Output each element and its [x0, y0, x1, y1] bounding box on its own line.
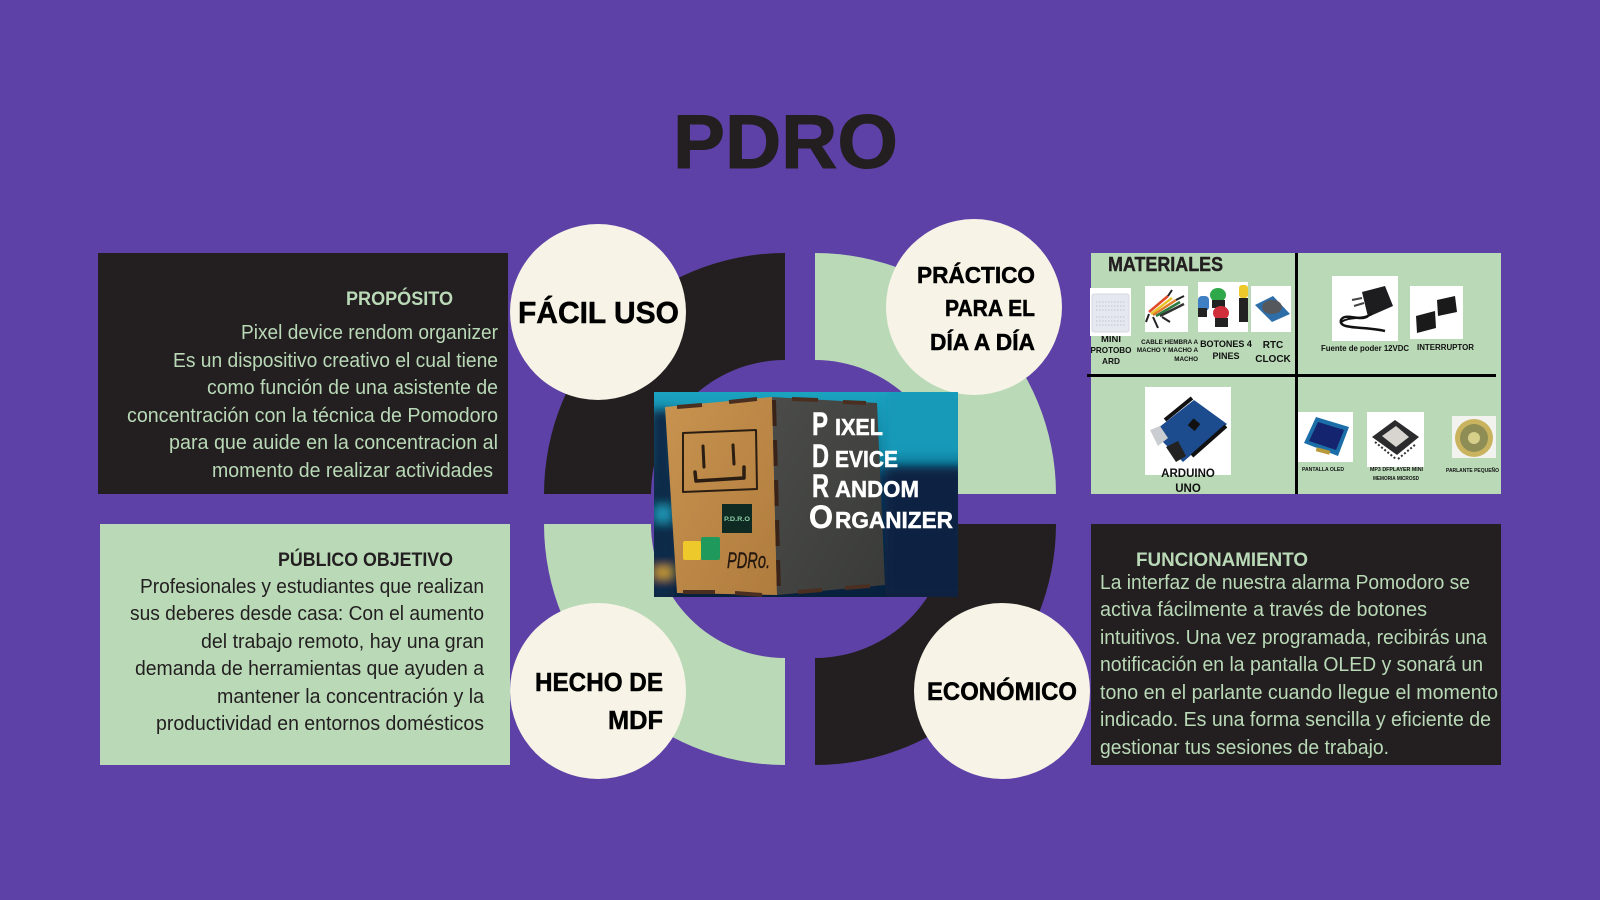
label: mp3 dfplayer — [1370, 467, 1423, 482]
icon: rtc clock — [1251, 286, 1291, 332]
text block: público objetivo: sus deberes desde casa: Con el aumento — [130, 603, 484, 625]
label: cables — [1137, 339, 1198, 363]
icon: pantalla oled — [1298, 412, 1353, 462]
text block: funcionamiento: gestionar tus sesiones de trabajo. — [1100, 737, 1389, 759]
handwritten pdro: PDRo. — [727, 548, 770, 573]
label: mini protoboard — [1090, 334, 1132, 366]
text block: público objetivo: mantener la concentración y la — [217, 686, 485, 708]
text block: público objetivo: demanda de herramientas que ayuden a — [135, 658, 485, 680]
circle: práctico para el día a día: PRÁCTICO — [917, 261, 1035, 288]
photo title text: ANDOM — [835, 476, 919, 502]
label: arduino uno — [1161, 468, 1215, 495]
heading: funcionamiento: FUNCIONAMIENTO — [1136, 550, 1308, 571]
text block: funcionamiento: notificación en la pantalla OLED y sonará un — [1100, 654, 1483, 676]
icon: parlante — [1452, 416, 1496, 458]
text block: propósito: Es un dispositivo creativo el cual tiene — [173, 350, 498, 372]
photo title text: P — [812, 406, 828, 442]
text block: público objetivo: productividad en entornos domésticos — [156, 713, 484, 735]
box left face — [665, 397, 777, 595]
text block: funcionamiento: intuitivos. Una vez programada, recibirás una — [1100, 627, 1488, 649]
panel: funcionamiento — [1091, 524, 1501, 765]
circle: hecho de mdf — [510, 603, 686, 779]
box right face — [772, 397, 885, 595]
circle: práctico para el día a día: DÍA A DÍA — [930, 328, 1035, 355]
icon: interruptor — [1410, 286, 1463, 339]
text block: público objetivo: del trabajo remoto, hay una gran — [201, 631, 484, 653]
label: mini protoboard: ARD — [1102, 356, 1120, 366]
label: rtc clock — [1255, 340, 1292, 365]
text block: funcionamiento: La interfaz de nuestra alarma Pomodoro se — [1100, 572, 1470, 594]
label: mini protoboard: PROTOBO — [1090, 345, 1132, 355]
text block: propósito: momento de realizar actividades — [212, 460, 493, 482]
icon: cables — [1145, 286, 1188, 332]
icon: fuente de poder — [1332, 276, 1398, 341]
text block: propósito: como función de una asistente de — [207, 377, 498, 399]
buttons — [683, 537, 720, 560]
circle: económico — [914, 603, 1090, 779]
label: fuente de poder: Fuente de poder 12VDC — [1321, 344, 1409, 353]
heading: propósito: PROPÓSITO — [346, 288, 453, 310]
ring quadrant: bottom left — [544, 524, 785, 765]
circle: hecho de mdf: HECHO DE — [535, 667, 663, 697]
label: mp3 dfplayer: MEMORIA MICROSD — [1373, 476, 1419, 482]
label: rtc clock: RTC — [1263, 340, 1283, 351]
label: parlante: PARLANTE PEQUEÑO — [1446, 467, 1500, 474]
text block: funcionamiento: tono en el parlante cuando llegue el momento — [1100, 682, 1498, 704]
infographic canvas — [98, 114, 1501, 779]
text block: propósito: para que auide en la concentracion al — [169, 432, 498, 454]
circle: fácil uso: FÁCIL USO — [518, 295, 679, 330]
circle: hecho de mdf: MDF — [608, 705, 663, 735]
heading: público objetivo: PÚBLICO OBJETIVO — [278, 549, 453, 571]
label: botones — [1200, 339, 1252, 361]
circle: práctico para el día a día: PARA EL — [945, 295, 1035, 321]
central photo: pdro box — [650, 392, 965, 600]
label: pantalla oled: PANTALLA OLED — [1302, 467, 1344, 473]
label: mini protoboard: MINI — [1101, 334, 1121, 344]
icon: mp3 dfplayer — [1367, 412, 1424, 467]
text block: funcionamiento — [1100, 572, 1498, 759]
label: interruptor: INTERRUPTOR — [1417, 343, 1474, 352]
label: mp3 dfplayer: MP3 DFPLAYER MINI — [1370, 467, 1423, 473]
circle: práctico para el día a día — [886, 219, 1062, 395]
ring quadrant: bottom right — [815, 524, 1056, 765]
circle: económico: ECONÓMICO — [927, 676, 1077, 706]
text block: funcionamiento: indicado. Es una forma sencilla y eficiente de — [1100, 709, 1491, 731]
text block: propósito — [127, 322, 498, 482]
text block: funcionamiento: activa fácilmente a través de botones — [1100, 599, 1427, 621]
label: rtc clock: CLOCK — [1255, 354, 1292, 365]
label: cables: MACHO — [1174, 356, 1198, 363]
label: arduino uno: UNO — [1175, 483, 1201, 495]
photo title text: D — [812, 438, 829, 474]
photo title text: O — [809, 499, 833, 535]
label: botones: BOTONES 4 — [1200, 339, 1252, 349]
circle: fácil uso — [510, 224, 686, 400]
ring quadrant: top right — [815, 253, 1056, 494]
photo title text: RGANIZER — [835, 507, 953, 533]
panel: propósito — [98, 253, 508, 494]
text block: propósito: Pixel device rendom organizer — [241, 322, 498, 344]
text block: propósito: concentración con la técnica de Pomodoro — [127, 405, 498, 427]
ring quadrant: top left — [544, 253, 785, 494]
icon: mini protoboard — [1090, 288, 1131, 336]
label: botones: PINES — [1212, 351, 1240, 361]
photo title text: EVICE — [835, 446, 898, 472]
label: arduino uno: ARDUINO — [1161, 468, 1215, 480]
label: cables: MACHO Y MACHO A — [1137, 347, 1198, 354]
pdro label — [722, 504, 752, 533]
heading: materiales: MATERIALES — [1108, 254, 1223, 276]
label: cables: CABLE HEMBRA A — [1141, 339, 1198, 346]
panel: público objetivo — [100, 524, 510, 765]
icon: arduino uno — [1145, 387, 1231, 475]
icon: botones — [1198, 282, 1248, 332]
panel: materiales — [1087, 253, 1501, 495]
photo title text: IXEL — [835, 414, 883, 440]
text block: público objetivo — [130, 576, 485, 735]
photo title text: R — [812, 468, 829, 504]
pdro label: P.D.R.O — [724, 516, 750, 523]
smiley face drawing — [683, 430, 757, 492]
text block: público objetivo: Profesionales y estudiantes que realizan — [140, 576, 484, 598]
title: PDRO — [673, 100, 898, 185]
photo title text — [810, 412, 953, 528]
